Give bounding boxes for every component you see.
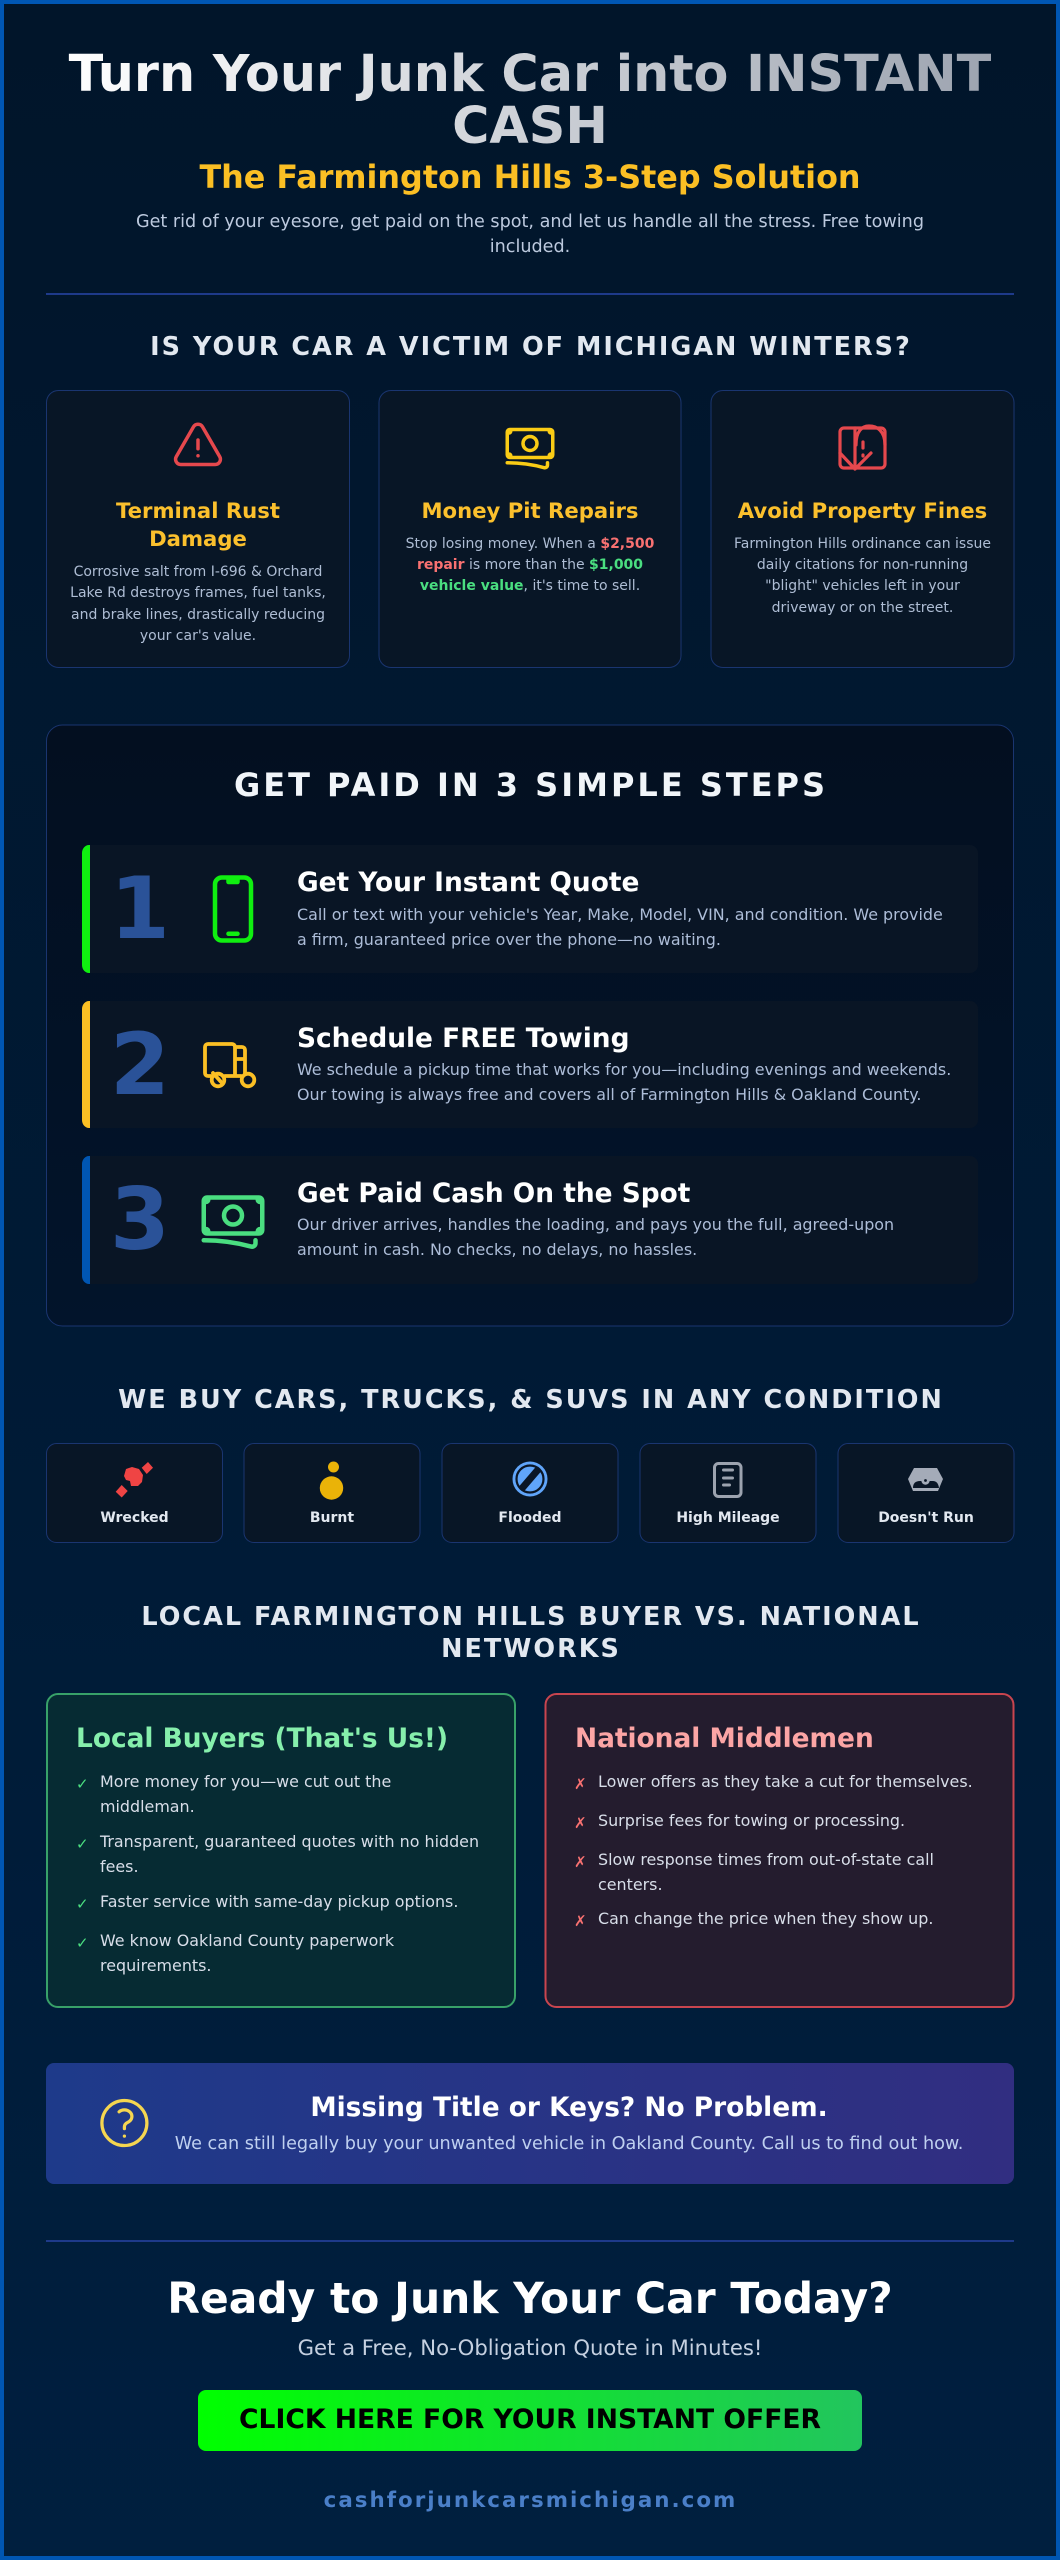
icon: warning triangle bbox=[176, 424, 220, 464]
heading: local vs national: NETWORKS bbox=[441, 1634, 621, 1664]
steps heading: GET PAID IN 3 SIMPLE STEPS bbox=[234, 766, 828, 804]
subtitle: The Farmington Hills 3-Step Solution bbox=[199, 159, 861, 196]
banner: missing title or keys bbox=[46, 2063, 1014, 2184]
step text: Call or text with your vehicle's Year, Make, Model, VIN, and condition. We provide bbox=[297, 905, 943, 924]
label: Wrecked bbox=[100, 1510, 169, 1526]
cta subheading: Get a Free, No-Obligation Quote in Minutes! bbox=[298, 2335, 762, 2360]
cross marks: ✗ bbox=[574, 1912, 587, 1930]
card text: daily citations for non-running bbox=[757, 557, 968, 573]
step text: Our driver arrives, handles the loading, and pays you the full, agreed-upon bbox=[297, 1215, 894, 1234]
heading: any condition: WE BUY CARS, TRUCKS, & SUVS IN ANY CONDITION bbox=[118, 1385, 944, 1415]
call to action bbox=[167, 2274, 893, 2513]
step number: 3 bbox=[110, 1170, 170, 1270]
drawback list: centers. bbox=[598, 1875, 663, 1894]
benefit list: fees. bbox=[100, 1857, 139, 1876]
label: Doesn't Run bbox=[878, 1510, 974, 1526]
card text: repair is more than the $1,000 bbox=[417, 557, 643, 573]
step text: a firm, guaranteed price over the phone—no waiting. bbox=[297, 930, 721, 949]
panel title: Local Buyers (That's Us!) bbox=[76, 1723, 448, 1754]
icon: flame drops bbox=[320, 1462, 343, 1500]
label: Flooded bbox=[498, 1510, 562, 1526]
check marks: ✓ bbox=[76, 1934, 89, 1952]
banner text: We can still legally buy your unwanted vehicle in Oakland County. Call us to find out how. bbox=[175, 2134, 963, 2154]
icon: tow truck bbox=[205, 1044, 254, 1086]
card title: Terminal Rust bbox=[116, 498, 280, 523]
title: CASH bbox=[452, 96, 608, 155]
check marks bbox=[76, 1775, 89, 1952]
drawback list: Can change the price when they show up. bbox=[598, 1909, 933, 1928]
drawback list: Lower offers as they take a cut for themselves. bbox=[598, 1772, 973, 1791]
step text: We schedule a pickup time that works for you—including evenings and weekends. bbox=[297, 1060, 951, 1079]
drawback list: Surprise fees for towing or processing. bbox=[598, 1811, 905, 1830]
card title: Damage bbox=[149, 526, 247, 551]
step 2 bbox=[82, 1001, 978, 1128]
icon: cash bbox=[204, 1198, 262, 1247]
icon: banknote bbox=[507, 429, 553, 468]
drawback list: Slow response times from out-of-state call bbox=[598, 1850, 934, 1869]
card title: Avoid Property Fines bbox=[738, 498, 987, 523]
icon: question mark bbox=[102, 2101, 147, 2146]
card text: driveway or on the street. bbox=[772, 600, 953, 616]
check marks: ✓ bbox=[76, 1775, 89, 1793]
card text: your car's value. bbox=[140, 628, 256, 644]
label: High Mileage bbox=[676, 1510, 780, 1526]
title: Turn Your Junk Car into INSTANT bbox=[69, 44, 992, 103]
divider bbox=[46, 2240, 1014, 2242]
step text: Our towing is always free and covers all of Farmington Hills & Oakland County. bbox=[297, 1085, 922, 1104]
card text: and brake lines, drastically reducing bbox=[71, 607, 325, 623]
check marks: ✓ bbox=[76, 1835, 89, 1853]
icon: document with alert bbox=[840, 426, 885, 469]
panel: local buyers bbox=[47, 1694, 515, 2007]
step text: amount in cash. No checks, no delays, no hassles. bbox=[297, 1240, 697, 1259]
tile: doesn't run bbox=[838, 1444, 1014, 1542]
panel: three steps bbox=[46, 725, 1014, 1326]
card title: Money Pit Repairs bbox=[421, 498, 639, 523]
icon: flooded bbox=[512, 1462, 548, 1496]
icon: phone bbox=[215, 878, 251, 940]
card text: Corrosive salt from I-696 & Orchard bbox=[74, 564, 322, 580]
step title: Get Your Instant Quote bbox=[297, 867, 639, 898]
tile: wrecked bbox=[46, 1444, 222, 1542]
icon: odometer document bbox=[714, 1464, 741, 1496]
tile: burnt bbox=[244, 1444, 420, 1542]
panel: terminal rust damage bbox=[46, 390, 350, 668]
cross marks: ✗ bbox=[574, 1814, 587, 1832]
intro text: Get rid of your eyesore, get paid on the spot, and let us handle all the stress. Free towing bbox=[136, 212, 924, 232]
heading: michigan winters: IS YOUR CAR A VICTIM OF MICHIGAN WINTERS? bbox=[150, 332, 912, 362]
step 1 bbox=[82, 845, 978, 973]
cta button: CLICK HERE FOR YOUR INSTANT OFFER bbox=[239, 2404, 821, 2435]
benefit list: More money for you—we cut out the bbox=[100, 1772, 391, 1791]
website url: cashforjunkcarsmichigan.com bbox=[324, 2488, 737, 2513]
cta button bbox=[198, 2390, 862, 2451]
banner title: Missing Title or Keys? No Problem. bbox=[310, 2092, 828, 2123]
benefit list: middleman. bbox=[100, 1797, 195, 1816]
step title: Get Paid Cash On the Spot bbox=[297, 1178, 691, 1209]
step number: 1 bbox=[110, 859, 170, 959]
panel: national middlemen bbox=[546, 1694, 1014, 2007]
card text: vehicle value, it's time to sell. bbox=[420, 578, 640, 594]
cross marks: ✗ bbox=[574, 1853, 587, 1871]
icon: wrecked bbox=[116, 1462, 153, 1498]
card text: Farmington Hills ordinance can issue bbox=[734, 536, 991, 552]
card text: "blight" vehicles left in your bbox=[765, 578, 960, 594]
card text: Stop losing money. When a $2,500 bbox=[406, 536, 654, 552]
cross marks bbox=[574, 1775, 587, 1930]
step title: Schedule FREE Towing bbox=[297, 1023, 629, 1054]
benefit list: requirements. bbox=[100, 1956, 212, 1975]
step number: 2 bbox=[110, 1015, 170, 1115]
divider bbox=[46, 293, 1014, 295]
benefit list: Transparent, guaranteed quotes with no hidden bbox=[99, 1832, 479, 1851]
cross marks: ✗ bbox=[574, 1775, 587, 1793]
heading: local vs national: LOCAL FARMINGTON HILLS BUYER VS. NATIONAL bbox=[141, 1602, 921, 1632]
tile: flooded bbox=[442, 1444, 618, 1542]
panel: money pit repairs bbox=[379, 390, 681, 668]
header bbox=[69, 44, 992, 257]
tile: high mileage bbox=[640, 1444, 816, 1542]
cta heading: Ready to Junk Your Car Today? bbox=[167, 2274, 893, 2323]
benefit list: Faster service with same-day pickup options. bbox=[100, 1892, 458, 1911]
panel title: National Middlemen bbox=[575, 1723, 874, 1754]
panel: avoid property fines bbox=[711, 390, 1014, 668]
step 3 bbox=[82, 1156, 978, 1284]
label: Burnt bbox=[310, 1510, 354, 1526]
card text: Lake Rd destroys frames, fuel tanks, bbox=[70, 585, 326, 601]
check marks: ✓ bbox=[76, 1895, 89, 1913]
intro text: included. bbox=[490, 237, 570, 257]
benefit list: We know Oakland County paperwork bbox=[100, 1931, 395, 1950]
icon: engine bbox=[908, 1468, 943, 1491]
